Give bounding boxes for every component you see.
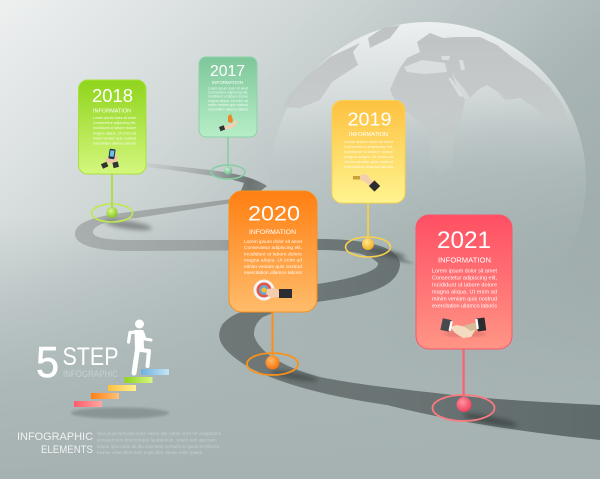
road: upper loop xyxy=(75,199,400,303)
card 2018 with pin xyxy=(78,80,152,232)
card 2019 with pin: magna aliqua. Ut enim ad xyxy=(344,154,393,159)
card 2019 with pin: exercitation ullamco laboris xyxy=(344,164,393,169)
card 2021 with pin: Incididunt ut labore dolore xyxy=(432,282,497,288)
card 2017 with pin: Lorem ipsum dolor sit amet xyxy=(208,86,248,90)
card 2020 with pin: magna aliqua. Ut enim ad xyxy=(244,258,302,264)
card 2019 with pin: Lorem ipsum dolor sit amet xyxy=(344,139,394,144)
card 2021 with pin xyxy=(416,215,518,429)
icon: hand on target xyxy=(254,280,292,300)
card 2019 with pin: Consectetur adipiscing elit, xyxy=(344,144,393,149)
logo: 5 step infographic xyxy=(36,320,169,418)
card 2018 with pin: minim veniam quis nostrud xyxy=(93,136,136,140)
footer heading: ELEMENTS xyxy=(41,444,93,456)
icon: hands holding phone xyxy=(101,149,119,169)
icon: person climbing xyxy=(128,320,151,373)
card 2018 with pin: Consectetur adipiscing elit, xyxy=(93,121,136,125)
icon: handshake xyxy=(440,317,486,338)
card 2020 with pin xyxy=(229,191,318,384)
card 2018 with pin: exercitation ullamco laboris xyxy=(93,142,136,146)
card 2017 with pin: Incididunt ut labore dolore xyxy=(208,95,248,99)
card 2018 with pin: 2018 xyxy=(92,86,133,106)
footer text: eaque ipsa quae ab illo inventore veritatis et quasi architecto xyxy=(97,444,220,449)
card 2018 with pin: magna aliqua. Ut enim ad xyxy=(93,131,136,135)
card 2021 with pin: minim veniam quis nostrud xyxy=(432,296,497,302)
card 2020 with pin: minim veniam quis nostrud xyxy=(244,264,302,270)
card 2017 with pin xyxy=(199,57,257,179)
card 2021 with pin: INFORMATION xyxy=(438,258,491,264)
card 2017 with pin: 2017 xyxy=(210,63,245,80)
footer text: Sed ut perspiciatis unde omnis iste natus error sit voluptatem xyxy=(97,431,222,436)
card 2020 with pin: Consectetur adipiscing elit, xyxy=(244,245,302,251)
card 2020 with pin: INFORMATION xyxy=(249,229,296,236)
card 2021 with pin: magna aliqua. Ut enim ad xyxy=(432,290,497,296)
card 2017 with pin: minim veniam quis nostrud xyxy=(208,103,248,107)
footer text xyxy=(97,431,222,455)
footer text: accusantium doloremque laudantium, totam rem aperiam, xyxy=(97,438,217,442)
card 2018 with pin: Lorem ipsum dolor sit amet xyxy=(93,116,137,120)
card 2018 with pin: INFORMATION xyxy=(93,108,131,114)
card 2021 with pin: Consectetur adipiscing elit, xyxy=(432,276,497,282)
card 2017 with pin: Consectetur adipiscing elit, xyxy=(208,90,248,94)
footer heading xyxy=(17,431,93,456)
card 2019 with pin xyxy=(332,100,406,260)
card 2017 with pin: exercitation ullamco laboris xyxy=(208,107,248,111)
logo: 5 step infographic: STEP xyxy=(62,343,118,371)
card 2019 with pin: INFORMATION xyxy=(349,132,388,138)
logo: 5 step infographic: 5 xyxy=(36,338,59,387)
card 2021 with pin: exercitation ullamco laboris xyxy=(432,304,497,310)
road tip shadow xyxy=(385,250,415,264)
card 2017 with pin: INFORMATION xyxy=(212,80,243,85)
card 2019 with pin: Incididunt ut labore dolore xyxy=(344,149,394,154)
globe xyxy=(270,22,586,338)
road: lower sweep xyxy=(219,284,600,440)
card 2019 with pin: 2019 xyxy=(348,110,392,130)
card 2017 with pin: magna aliqua. Ut enim ad xyxy=(208,99,248,103)
card 2021 with pin: 2021 xyxy=(437,227,491,254)
card 2021 with pin: Lorem ipsum dolor sit amet xyxy=(432,268,497,274)
logo: 5 step infographic: INFOGRAPHIC xyxy=(63,369,118,380)
card 2020 with pin: 2020 xyxy=(248,202,300,226)
staircase xyxy=(74,369,169,407)
footer text: beatae vitae dicta sunt explicabo. Nemo enim ipsam xyxy=(97,450,202,455)
card 2020 with pin: Incididunt ut labore dolore xyxy=(244,251,302,257)
road: upper back segment xyxy=(147,163,267,193)
card 2018 with pin: Incididunt ut labore dolore xyxy=(93,126,136,130)
card 2020 with pin: exercitation ullamco laboris xyxy=(244,270,303,276)
icon: hand holding coin xyxy=(219,114,238,131)
card 2019 with pin: minim veniam quis nostrud xyxy=(344,159,393,164)
icon: hand with card xyxy=(353,174,380,192)
footer heading: INFOGRAPHIC xyxy=(17,431,93,443)
card 2020 with pin: Lorem ipsum dolor sit amet xyxy=(244,239,303,245)
step shadow xyxy=(71,408,169,418)
